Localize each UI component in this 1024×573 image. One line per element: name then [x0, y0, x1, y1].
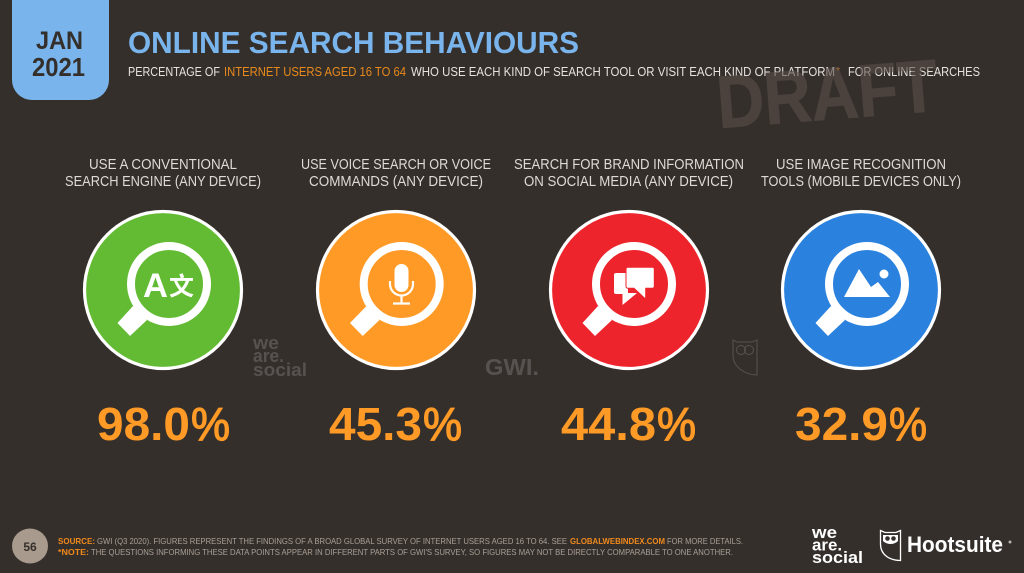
logo: we are social: we: [811, 523, 837, 542]
statistic: brand information: [561, 398, 696, 450]
logo: Hootsuite: Hootsuite: [907, 532, 1003, 557]
title: ONLINE SEARCH BEHAVIOURS: [128, 25, 579, 60]
source and note: GLOBALWEBINDEX.COM: [570, 536, 665, 546]
date badge: [12, 0, 109, 100]
subtitle: [128, 64, 980, 79]
statistic: voice search: %: [423, 398, 462, 450]
logo: we are social: are.: [812, 536, 842, 554]
icon: translate search on green circle: [84, 212, 242, 368]
source and note: *NOTE:: [58, 547, 89, 557]
icon: speech bubbles search on red circle: [550, 212, 708, 368]
statistic: brand information: 44.8: [561, 398, 656, 450]
statistic: image recognition: 32.9: [795, 398, 888, 450]
icon: image search on blue circle: [782, 212, 940, 368]
logo: we are social: social: [812, 548, 863, 567]
statistic: conventional search engine: %: [191, 398, 230, 450]
column label: voice search: COMMANDS (ANY DEVICE): [309, 173, 483, 190]
statistic: conventional search engine: [97, 398, 230, 450]
subtitle: PERCENTAGE OF: [128, 64, 220, 79]
column label: conventional search engine: USE A CONVENTIONAL: [89, 156, 237, 173]
statistic: conventional search engine: 98.0: [97, 398, 190, 450]
column label: voice search: [301, 156, 491, 190]
column label: conventional search engine: SEARCH ENGINE (ANY DEVICE): [65, 173, 261, 190]
column label: brand information: [514, 156, 744, 190]
watermark: GWI: GWI.: [485, 354, 539, 380]
watermark: we are social: we: [252, 333, 279, 353]
icon: translate search on green circle: A: [143, 267, 168, 305]
logo: we are social: [811, 523, 863, 567]
column label: conventional search engine: [65, 156, 261, 190]
watermark: we are social: social: [253, 360, 307, 380]
watermark: owl shield: [733, 340, 757, 375]
source and note: THE QUESTIONS INFORMING THESE DATA POINTS APPEAR IN DIFFERENT PARTS OF GWI'S SURVEY, SO FIGURES MAY NOT BE DIRECTLY COMPARABLE TO ONE ANOTHER.: [91, 547, 733, 557]
date badge: 2021: [32, 54, 85, 82]
source and note: GWI (Q3 2020). FIGURES REPRESENT THE FINDINGS OF A BROAD GLOBAL SURVEY OF INTERNET USERS AGED 16 TO 64. SEE: [97, 536, 567, 546]
page number: [12, 528, 48, 564]
column label: image recognition: TOOLS (MOBILE DEVICES ONLY): [761, 173, 961, 190]
statistic: voice search: 45.3: [329, 398, 422, 450]
column label: image recognition: USE IMAGE RECOGNITION: [776, 156, 946, 173]
source and note: FOR MORE DETAILS.: [667, 536, 743, 546]
subtitle: *: [836, 66, 840, 77]
statistic: voice search: [329, 398, 462, 450]
statistic: image recognition: %: [889, 398, 927, 450]
subtitle: FOR ONLINE SEARCHES: [848, 64, 980, 79]
icon: translate search on green circle: 文: [169, 267, 194, 303]
column label: brand information: SEARCH FOR BRAND INFORMATION: [514, 156, 744, 173]
subtitle: WHO USE EACH KIND OF SEARCH TOOL OR VISIT EACH KIND OF PLATFORM: [411, 64, 835, 79]
logo: Hootsuite: [880, 530, 1012, 560]
date badge: JAN: [36, 27, 83, 55]
source and note: [58, 536, 743, 557]
column label: voice search: USE VOICE SEARCH OR VOICE: [301, 156, 491, 173]
column label: brand information: ON SOCIAL MEDIA (ANY DEVICE): [524, 173, 733, 190]
watermark: we are social: [252, 333, 307, 380]
source and note: SOURCE:: [58, 536, 95, 546]
column label: image recognition: [761, 156, 961, 190]
watermark: we are social: are.: [253, 346, 284, 366]
icon: microphone search on orange circle: [318, 212, 474, 368]
statistic: image recognition: [795, 398, 927, 450]
draft watermark: DRAFT: [714, 44, 941, 144]
subtitle: INTERNET USERS AGED 16 TO 64: [224, 64, 406, 79]
page number: 56: [23, 540, 37, 554]
statistic: brand information: %: [657, 398, 696, 450]
